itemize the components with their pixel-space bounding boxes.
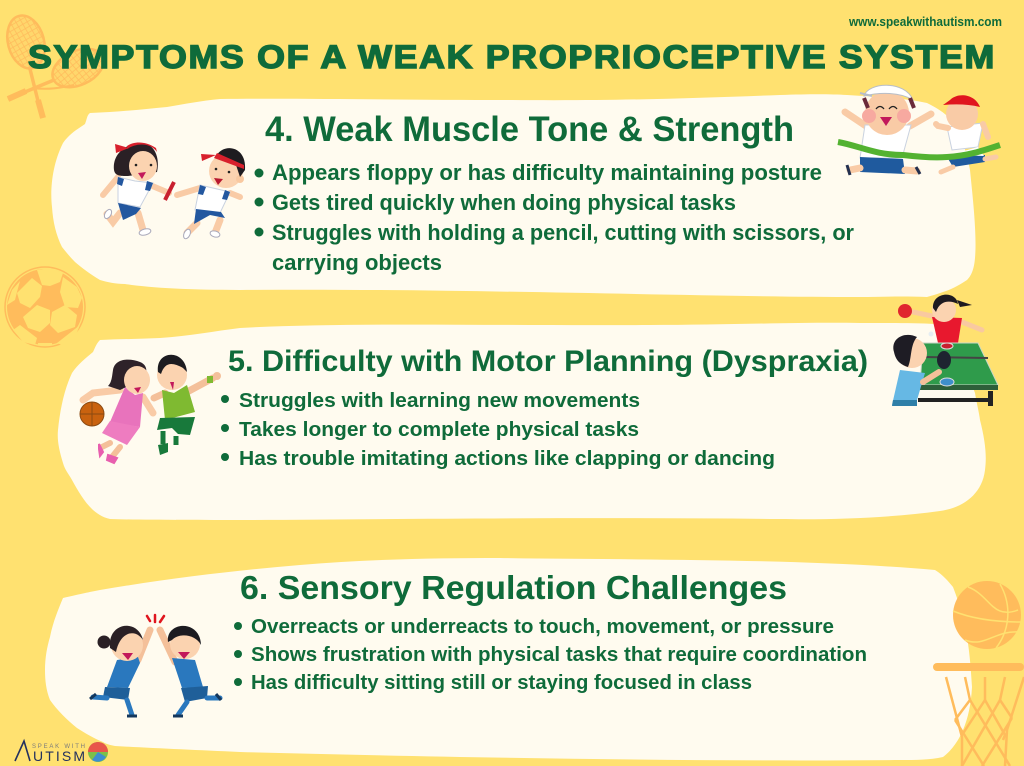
icon: crossed tennis rackets — [2, 11, 110, 118]
illustration: table tennis players — [892, 295, 998, 406]
bullet list: sensory regulation — [234, 616, 867, 694]
bullet list: sensory regulation: Shows frustration with physical tasks that require coordination — [251, 644, 867, 666]
logo: speak with autism: UTISM — [33, 748, 85, 764]
bullet list: motor planning: Takes longer to complete physical tasks — [239, 419, 639, 441]
logo: speak with autism: SPEAK WITH — [32, 744, 85, 750]
bullet list: weak muscle tone: Gets tired quickly when doing physical tasks — [272, 190, 736, 215]
panel: motor planning — [58, 323, 986, 520]
icon: basketball hoop and net — [933, 663, 1024, 766]
panel: weak muscle tone — [51, 94, 976, 297]
bullet list: motor planning — [221, 390, 775, 470]
bullet list: sensory regulation: Has difficulty sitting still or staying focused in class — [251, 672, 752, 694]
illustration: high five kids — [90, 615, 221, 716]
illustration: relay runners — [103, 142, 245, 240]
icon: soccer ball — [5, 267, 85, 347]
heading: sensory regulation: 6. Sensory Regulation Challenges — [240, 569, 787, 606]
heading: motor planning: 5. Difficulty with Motor Planning (Dyspraxia) — [228, 345, 868, 378]
heading: weak muscle tone: 4. Weak Muscle Tone & Strength — [265, 110, 794, 149]
illustration: finish line runners — [838, 85, 1000, 175]
bullet list: weak muscle tone: Struggles with holding a pencil, cutting with scissors, or — [272, 220, 854, 245]
bullet list: motor planning: Struggles with learning new movements — [239, 390, 640, 412]
icon: basketball — [953, 581, 1021, 649]
bullet list: weak muscle tone: carrying objects — [272, 250, 442, 275]
panel: sensory regulation — [45, 558, 972, 760]
illustration: basketball players — [80, 355, 221, 463]
title: SYMPTOMS OF A WEAK PROPRIOCEPTIVE SYSTEM — [28, 39, 996, 75]
website url: www.speakwithautism.com — [848, 14, 1002, 29]
logo: speak with autism — [15, 741, 108, 764]
bullet list: weak muscle tone: Appears floppy or has difficulty maintaining posture — [272, 160, 822, 185]
bullet list: weak muscle tone — [254, 160, 854, 275]
bullet list: motor planning: Has trouble imitating actions like clapping or dancing — [239, 448, 775, 470]
bullet list: sensory regulation: Overreacts or underreacts to touch, movement, or pressure — [251, 616, 834, 638]
